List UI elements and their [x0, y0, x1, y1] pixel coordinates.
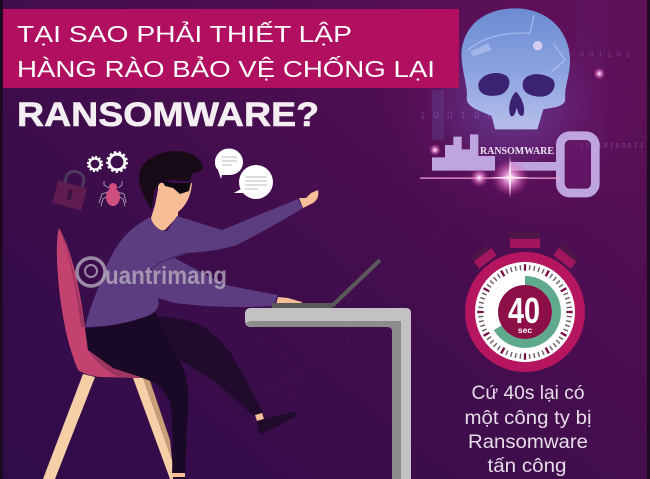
stopwatch: [465, 232, 585, 372]
keyboard hand: [276, 297, 302, 305]
title line 1: TẠI SAO PHẢI THIẾT LẬP: [17, 19, 352, 47]
icon: large gear: [108, 152, 126, 172]
skull circuit details: [468, 15, 565, 72]
neck and face: [151, 183, 192, 230]
watermark: uantrimang: [105, 262, 227, 290]
near leg: [85, 312, 188, 474]
binary digits: [420, 50, 644, 149]
icon: small gear: [88, 157, 102, 171]
stopwatch caption: [464, 382, 592, 477]
speech bubble small: [215, 148, 243, 179]
left eye socket: [478, 73, 509, 96]
centre disc: [498, 285, 552, 339]
trousers: [85, 312, 263, 474]
right eye socket: [523, 74, 555, 97]
icon: padlock: [52, 168, 91, 210]
binary digits: 1 0 1 1 0 1 0 0 0 1 1: [580, 143, 644, 149]
lens flare: [420, 155, 560, 198]
icon: spider: [99, 181, 126, 206]
watermark: [77, 258, 227, 290]
nose cavity: [509, 92, 524, 116]
key: [432, 134, 595, 193]
title line 2: HÀNG RÀO BẢO VỆ CHỐNG LẠI: [17, 54, 435, 82]
minor ticks: [480, 268, 570, 356]
right button: [553, 244, 579, 269]
shoes: [173, 412, 297, 479]
chair shell: [57, 228, 142, 378]
skull and key illustration: [420, 8, 644, 198]
sweater with arms: [85, 199, 303, 327]
title keyword: RANSOMWARE?: [17, 96, 319, 134]
binary digits: 1 0 0 1 0 0 1 0: [420, 110, 520, 121]
eye mask: [161, 179, 191, 194]
stopwatch caption: Cứ 40s lại có: [472, 382, 585, 404]
number 40: 40: [508, 290, 540, 331]
far leg: [140, 315, 263, 417]
stopwatch caption: Ransomware: [468, 431, 588, 453]
chair legs: [43, 374, 174, 479]
binary digits: 0 0 1 1 0 1: [580, 50, 630, 59]
desk: [245, 308, 411, 479]
major ticks: [480, 268, 570, 356]
speech bubble large: [234, 165, 273, 199]
green 40 second arc: [498, 280, 556, 344]
title banner: [3, 9, 459, 88]
stopwatch caption: một công ty bị: [464, 407, 592, 429]
left button: [471, 244, 497, 269]
stopwatch caption: tấn công: [488, 455, 566, 477]
ankles: [172, 413, 264, 477]
glowing dots: [429, 68, 605, 156]
sweater fold: [150, 253, 187, 270]
sec label: sec: [518, 325, 532, 335]
raised hand: [299, 190, 318, 208]
key label: RANSOMWARE: [480, 146, 554, 157]
hacker illustration: [43, 148, 411, 479]
skull: [461, 8, 570, 129]
hair: [139, 151, 203, 210]
background glow behind skull: [370, 0, 650, 235]
top button: [510, 232, 540, 248]
faint background crack lines: [250, 200, 640, 440]
outer case: [465, 252, 585, 372]
skull bright spot: [533, 41, 542, 50]
white dial: [475, 262, 575, 362]
laptop: [272, 260, 380, 308]
